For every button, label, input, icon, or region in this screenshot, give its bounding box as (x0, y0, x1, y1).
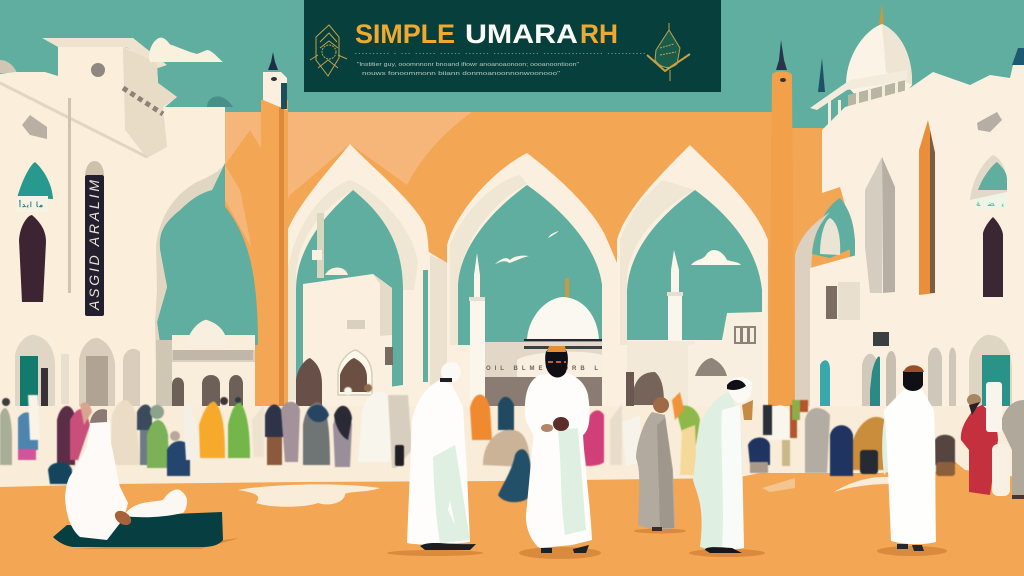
right cream building with dome: يضة (976, 199, 1004, 208)
sitting figure on green mat (53, 409, 240, 549)
white minaret right of dome (667, 250, 683, 400)
arch 3 (617, 145, 768, 412)
left archway sky opening (166, 191, 258, 345)
standing figure 1: white turban, white robe (387, 362, 483, 556)
banner subtitle text: nouws fonoommonn biiann donmoanoonnonwoonooo" (362, 71, 560, 77)
birds (495, 231, 559, 264)
standing figure 4: bowing in white (689, 377, 765, 557)
banner subtitle text: "lnstitier guy, ooomnnonr bnoand ifiowr anoanoaonoon; oooanoontioon" (357, 62, 579, 68)
standing figure 5: white robe, dark head (877, 365, 947, 556)
standing figure 3: grey robe (634, 397, 686, 534)
standing figure 2: dark face, orange cap (519, 346, 601, 559)
white luggage and grey figure at right edge (986, 382, 1024, 499)
banner title text (355, 19, 618, 49)
pale ground patches (238, 477, 889, 507)
cloud in arch 3 (691, 250, 741, 265)
crowd, centre and right (470, 392, 955, 502)
banner subtitle text (354, 50, 647, 77)
orange arcade wall (225, 112, 850, 412)
left orange minaret (261, 52, 288, 410)
central mosque behind arch 2: OIL BLME I ORB L (486, 366, 598, 372)
banner title text: UMARA (465, 19, 578, 49)
central mosque behind arch 2 (484, 278, 602, 412)
title banner (304, 0, 721, 92)
red robed figure (961, 394, 998, 495)
banner ornament: left (310, 25, 347, 76)
orange ground (0, 456, 1024, 576)
cream courtyard building, far left (172, 320, 255, 412)
right orange minaret (769, 40, 794, 412)
banner ornament: right (647, 23, 690, 81)
left cream building: ASGID ARALIM (86, 180, 102, 311)
left cloud (149, 38, 223, 62)
left cream building (0, 38, 225, 416)
banner subtitle text: .......... . ... ...... ...... ....... ............. ................. ........... (354, 50, 647, 56)
arch 2 (447, 153, 617, 412)
crowd, left side (0, 384, 412, 484)
white minaret left of dome (469, 253, 485, 400)
building under arch 3 (626, 312, 762, 412)
courtyard plaza (0, 406, 1024, 488)
banner title text: SIMPLE (355, 19, 455, 49)
right cream building with dome (795, 3, 1024, 413)
left cream building: ما ابدأ (19, 199, 43, 209)
small left dome (207, 96, 233, 107)
banner title text: RH (580, 19, 618, 49)
arch 1 with building behind (283, 144, 447, 412)
